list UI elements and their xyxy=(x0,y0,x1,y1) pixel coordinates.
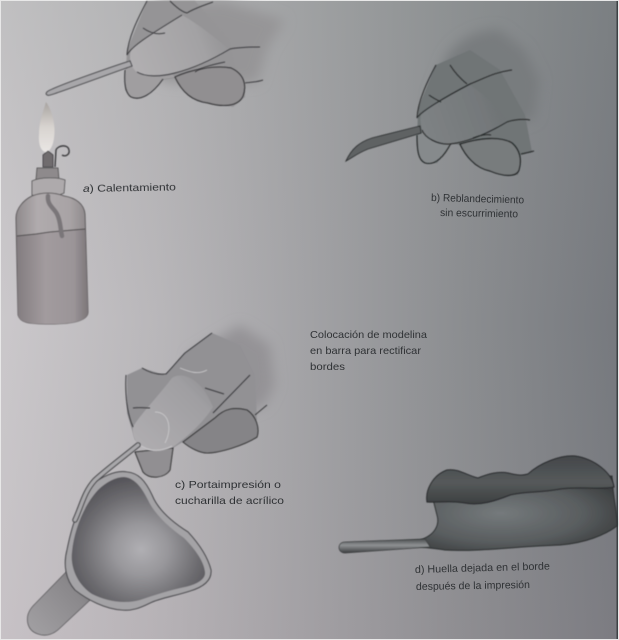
label b: b) Reblandecimiento xyxy=(431,192,524,206)
label: stick placement note: Colocación de modelina xyxy=(310,329,427,341)
icon: hand holding stick over flame xyxy=(46,1,285,107)
label c: cucharilla de acrílico xyxy=(175,495,284,507)
label c xyxy=(175,479,284,507)
flame xyxy=(39,102,55,152)
bottle body xyxy=(16,193,88,324)
icon: lower impression body xyxy=(405,476,617,550)
panel d: border impression xyxy=(339,456,617,593)
panel a: heating the stick xyxy=(16,1,285,324)
icon: tray handle xyxy=(27,568,90,635)
icon: hand with softened stick xyxy=(346,30,540,175)
label b: sin escurrimiento xyxy=(440,207,518,220)
panel c: acrylic tray xyxy=(27,325,284,635)
icon: stick foot of impression xyxy=(339,539,430,553)
icon: impression tray xyxy=(65,445,211,610)
label c: c) Portaimpresión o xyxy=(175,479,281,491)
wick xyxy=(48,196,62,236)
label a: a) Calentamiento xyxy=(83,181,176,195)
label b xyxy=(431,192,524,220)
panel b: softening xyxy=(346,30,540,220)
label: stick placement note: bordes xyxy=(310,361,345,373)
softened stick xyxy=(346,126,421,161)
label: stick placement note xyxy=(310,329,427,373)
label d xyxy=(415,560,550,593)
stick along tray edge xyxy=(75,445,138,520)
label d: después de la impresión xyxy=(416,579,530,593)
label d: d) Huella dejada en el borde xyxy=(415,560,550,576)
wick holder and hook xyxy=(55,146,69,167)
label: stick placement note: en barra para rectificar xyxy=(310,345,422,357)
icon: alcohol lamp xyxy=(16,102,88,324)
stick xyxy=(46,61,132,95)
icon: upper impression lobes xyxy=(427,456,614,504)
icon: hand applying stick to tray xyxy=(126,325,275,477)
liquid xyxy=(17,229,88,324)
